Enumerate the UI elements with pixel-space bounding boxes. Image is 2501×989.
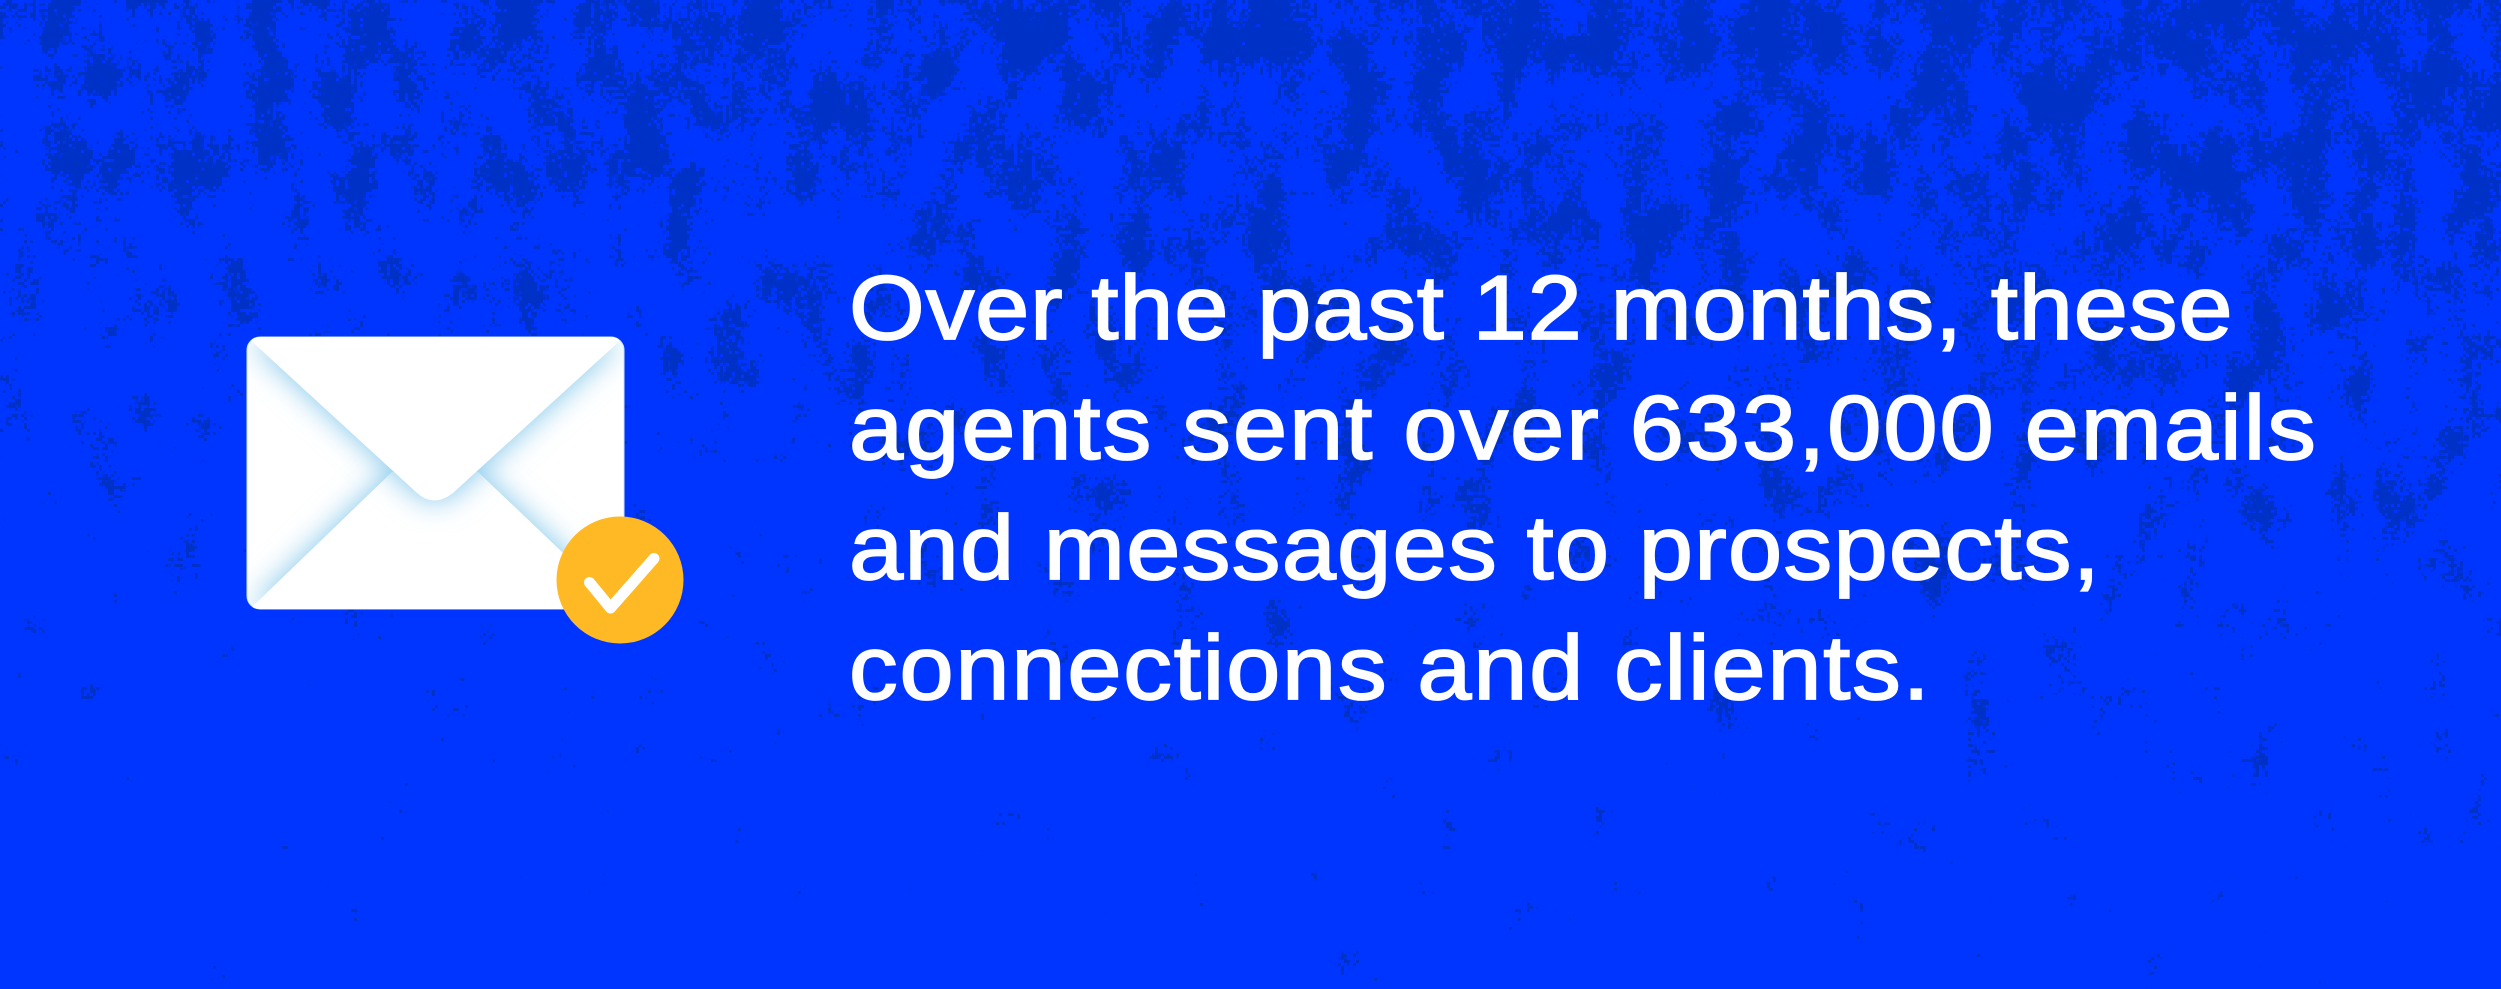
statement text: connections and clients. <box>849 617 1930 718</box>
statement text <box>849 257 2316 718</box>
icon: envelope with check badge <box>247 337 684 644</box>
statement text: Over the past 12 months, these <box>849 257 2233 358</box>
envelope body <box>247 337 624 609</box>
statement text: and messages to prospects, <box>849 497 2100 598</box>
check badge <box>556 516 684 644</box>
statement text: agents sent over 633,000 emails <box>849 377 2316 478</box>
